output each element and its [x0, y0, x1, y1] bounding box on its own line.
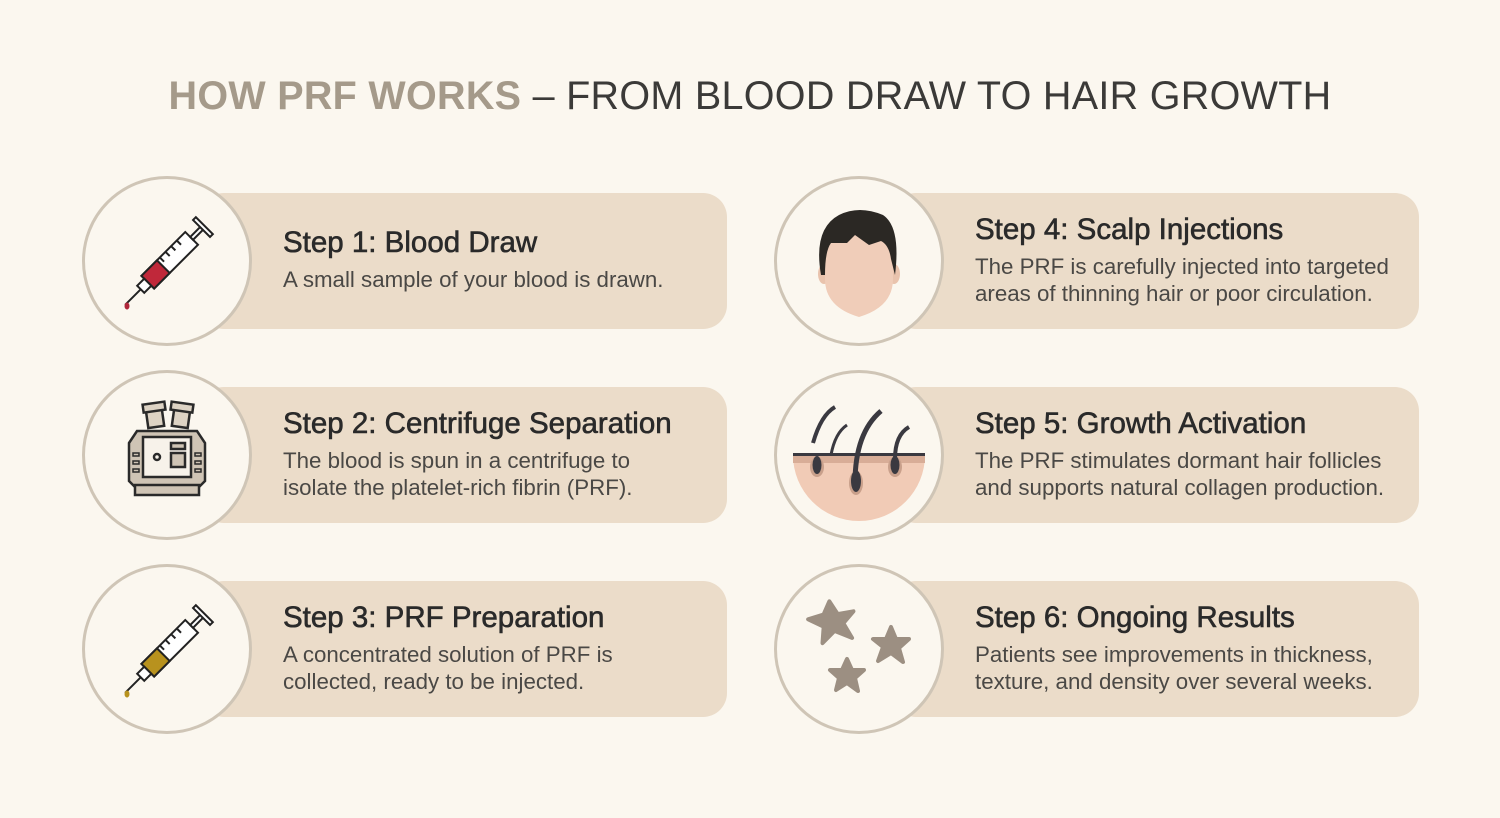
text: step 6: texture, and density over several weeks. [975, 669, 1373, 694]
text: step 3: Step 3: PRF Preparation [283, 601, 604, 634]
text: step 4 [975, 213, 1389, 306]
text: step 4: The PRF is carefully injected into targeted [975, 254, 1389, 279]
text: step 2: Step 2: Centrifuge Separation [283, 407, 672, 440]
text: step 6: Patients see improvements in thickness, [975, 642, 1373, 667]
panel: step 2 [82, 370, 727, 540]
text: step 2: The blood is spun in a centrifuge to [283, 448, 630, 473]
text: step 6 [975, 601, 1373, 694]
text: step 2: isolate the platelet-rich fibrin (PRF). [283, 475, 632, 500]
text: step 6: Step 6: Ongoing Results [975, 601, 1295, 634]
icon: syringe PRF [82, 564, 252, 734]
text: step 1 [283, 226, 663, 292]
text: step 3 [283, 601, 613, 694]
text: step 4: Step 4: Scalp Injections [975, 213, 1283, 246]
text: step 3: A concentrated solution of PRF is [283, 642, 613, 667]
text: step 5 [975, 407, 1384, 500]
text: step 3: collected, ready to be injected. [283, 669, 584, 694]
icon: hair follicles [774, 370, 944, 540]
text: step 5: The PRF stimulates dormant hair follicles [975, 448, 1381, 473]
title: HOW PRF WORKS – FROM BLOOD DRAW TO HAIR GROWTH [168, 74, 1331, 118]
icon: stars [774, 564, 944, 734]
text: step 1: A small sample of your blood is drawn. [283, 267, 663, 292]
text: step 2 [283, 407, 672, 500]
text: step 5: Step 5: Growth Activation [975, 407, 1306, 440]
panel: step 1 [82, 176, 727, 346]
icon: centrifuge [82, 370, 252, 540]
text: step 5: and supports natural collagen production. [975, 475, 1384, 500]
panel: step 4 [774, 176, 1419, 346]
panel: step 5 [774, 370, 1419, 540]
icon: syringe blood [82, 176, 252, 346]
panel: step 6 [774, 564, 1419, 734]
panel: step 3 [82, 564, 727, 734]
text: step 4: areas of thinning hair or poor circulation. [975, 281, 1373, 306]
icon: face [774, 176, 944, 346]
text: step 1: Step 1: Blood Draw [283, 226, 537, 259]
